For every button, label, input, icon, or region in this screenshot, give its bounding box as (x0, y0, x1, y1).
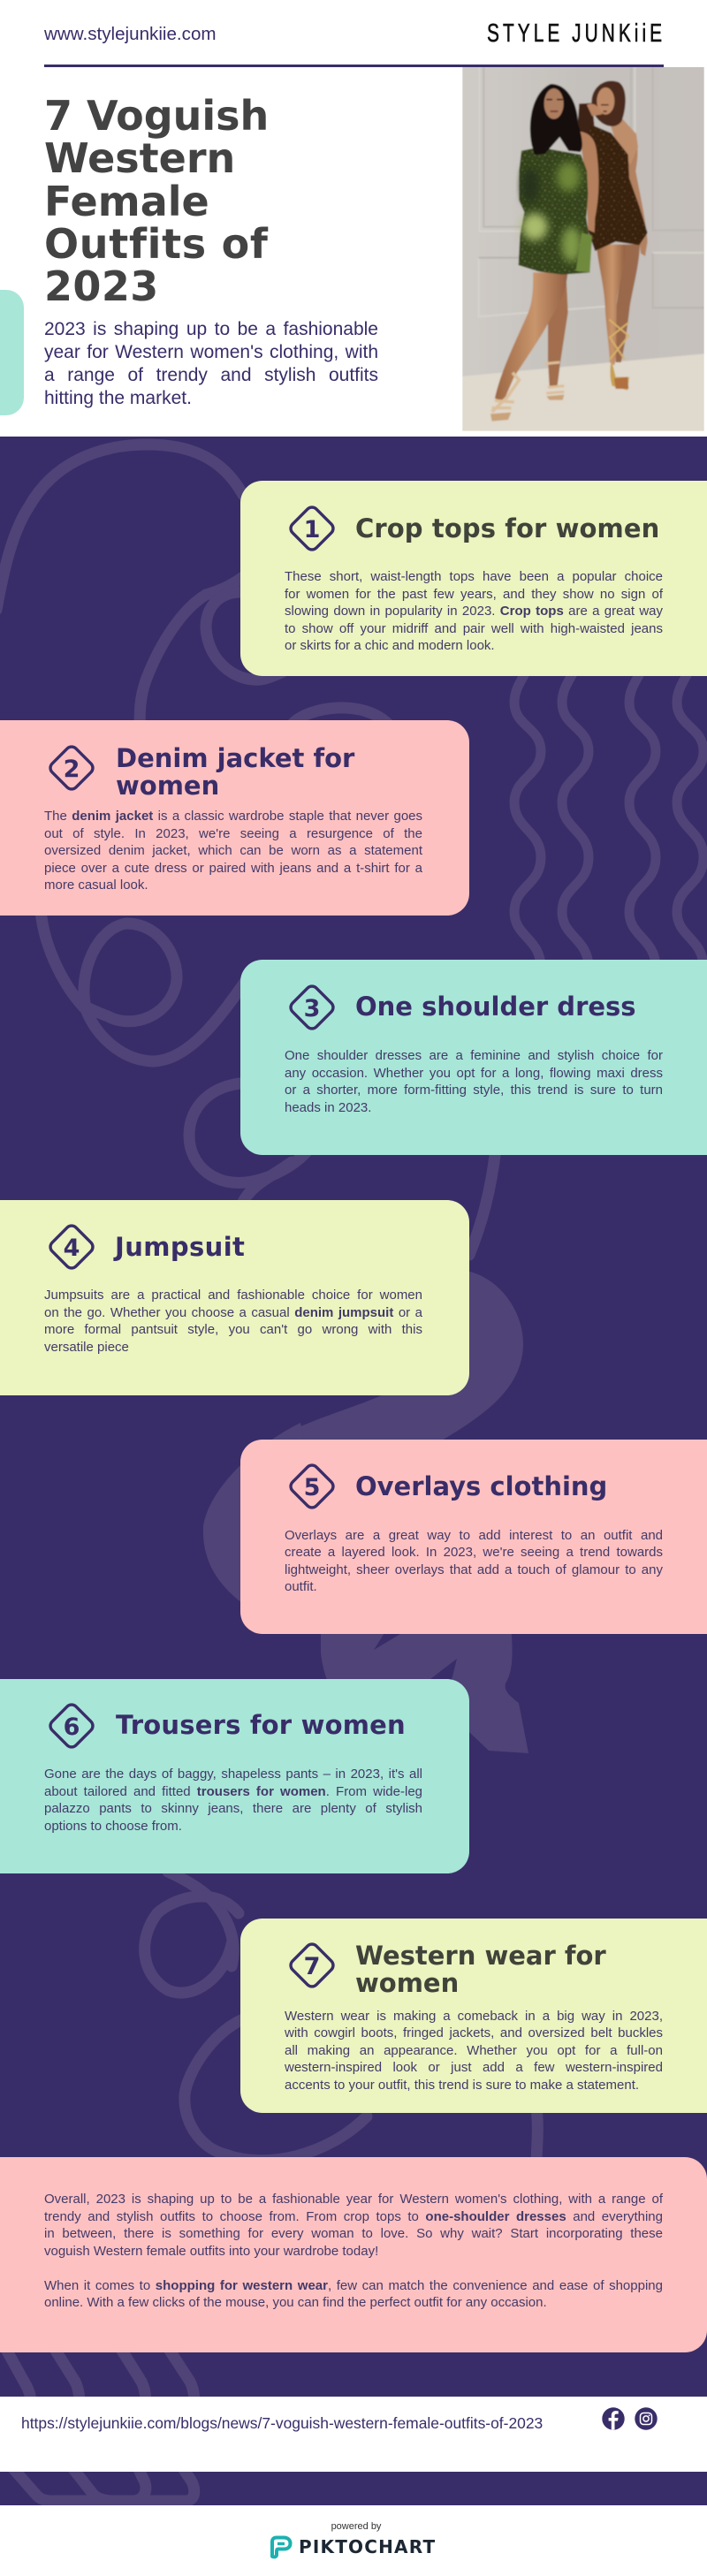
body text: piece over a cute dress or paired with jeans and a t-shirt for a (44, 861, 422, 875)
photo: two women in sequin dresses (462, 67, 704, 431)
card 7: western wear (240, 1918, 707, 2113)
title: Female (44, 178, 209, 225)
conclusion text: When it comes to shopping for western wear, few can match the convenience and ease of shopping (44, 2278, 663, 2292)
body text: or a shorter, more form-fitting style, this trend is sure to turn (285, 1083, 663, 1098)
body text: on the go. Whether you choose a casual denim jumpsuit or a (44, 1304, 422, 1320)
body text: Gone are the days of baggy, shapeless pants – in 2023, it's all (44, 1767, 422, 1782)
wall panels (479, 67, 704, 316)
icon: number 7 (289, 1942, 335, 1988)
intro text: 2023 is shaping up to be a fashionable (44, 319, 378, 339)
card 4: jumpsuit (0, 1200, 469, 1395)
powered by label: powered by (331, 2521, 381, 2532)
conclusion text: online. With a few clicks of the mouse, you can find the perfect outfit for any occasion. (44, 2295, 547, 2310)
conclusion text: voguish Western female outfits into your wardrobe today! (44, 2243, 378, 2259)
front woman (490, 84, 598, 422)
body text (285, 1527, 663, 1594)
body text: more casual look. (44, 878, 148, 893)
intro text: hitting the market. (44, 388, 192, 408)
body text: accents to your outfit, this trend is sure to make a statement. (285, 2077, 639, 2093)
body text (44, 1288, 422, 1354)
wall (462, 67, 704, 376)
heading: Western wear for (355, 1941, 606, 1971)
conclusion text: trendy and stylish outfits to choose from. From crop tops to one-shoulder dresses and everything (44, 2209, 663, 2223)
body text: heads in 2023. (285, 1099, 371, 1115)
icon: number 5 (289, 1463, 335, 1509)
title: Outfits of (44, 220, 269, 268)
icon: number 2 (49, 745, 95, 791)
body text: western-inspired look or just add a few western-inspired (285, 2060, 663, 2075)
conclusion text: Overall, 2023 is shaping up to be a fashionable year for Western women's clothing, with a range of (44, 2192, 663, 2207)
heading: women (116, 771, 219, 801)
body text: The denim jacket is a classic wardrobe staple that never goes (44, 809, 422, 824)
teal side tab (0, 290, 24, 415)
icon: piktochart logo (270, 2536, 292, 2559)
icon: number 1 (289, 505, 335, 551)
body text: all making an appearance. Whether you opt for a full-on (285, 2043, 663, 2057)
footer white band (0, 2397, 707, 2472)
heading: women (355, 1967, 459, 1997)
header rule (44, 65, 664, 67)
body text: out of style. In 2023, we're seeing a resurgence of the (44, 825, 422, 841)
body text: Western wear is making a comeback in a big way in 2023, (285, 2008, 663, 2024)
icon: facebook (602, 2407, 625, 2430)
conclusion panel (0, 2157, 707, 2352)
body text (285, 569, 663, 653)
website address: www.stylejunkiie.com (44, 24, 217, 44)
icon: number 4: 4 (64, 1235, 80, 1262)
conclusion text (44, 2192, 663, 2310)
body text (285, 1048, 663, 1115)
title (44, 92, 269, 310)
icon: number 1: 1 (304, 516, 320, 543)
icon: number 4 (49, 1224, 95, 1270)
icon: number 5: 5 (304, 1474, 320, 1501)
body text: palazzo pants to skinny jeans, there are plenty of stylish (44, 1801, 422, 1816)
conclusion text: in between, there is something for every woman to love. So why wait? Start incorporating these (44, 2226, 663, 2241)
piktochart wordmark: PIKTOCHART (299, 2536, 436, 2557)
icon: number 7: 7 (304, 1953, 320, 1980)
icon: number 2: 2 (64, 756, 80, 783)
card 2: denim jacket (0, 720, 469, 916)
intro text: year for Western women's clothing, with (44, 342, 378, 362)
icon: instagram (635, 2407, 658, 2430)
icon: number 3 (289, 984, 335, 1030)
body text: more formal pantsuit style, you can't go wrong with this (44, 1322, 422, 1337)
body text: These short, waist-length tops have been a popular choice (285, 569, 663, 584)
blob shapes (203, 1270, 528, 1753)
back woman (577, 81, 648, 391)
body text: Overlays are a great way to add interest to an outfit and (285, 1527, 663, 1543)
body text: with cowgirl boots, fringed jackets, and oversized belt buckles (285, 2025, 663, 2040)
body text: lightweight, sheer overlays that add a touch of glamour to any (285, 1562, 663, 1577)
body text: to show off your midriff and pair well with high-waisted jeans (285, 620, 663, 636)
title: Western (44, 134, 235, 182)
title: 2023 (44, 262, 159, 310)
card 6: trousers (0, 1679, 469, 1873)
intro text (44, 319, 378, 408)
footer URL: https://stylejunkiie.com/blogs/news/7-voguish-western-female-outfits-of-2023 (21, 2414, 543, 2432)
heading (355, 1941, 606, 1997)
icon: number 6: 6 (64, 1714, 80, 1741)
heading: Trousers for women (116, 1710, 406, 1740)
card 1: crop tops (240, 481, 707, 676)
body text: oversized denim jacket, which can be worn as a statement (44, 843, 422, 858)
body text: Jumpsuits are a practical and fashionable choice for women (44, 1288, 422, 1303)
body text: create a layered look. In 2023, we're seeing a trend towards (285, 1545, 663, 1560)
icon: number 6 (49, 1703, 95, 1749)
body text: options to choose from. (44, 1819, 182, 1833)
body text: for women for the past few years, and they show no sign of (285, 587, 663, 601)
body text: about tailored and fitted trousers for women. From wide-leg (44, 1783, 422, 1799)
body text: versatile piece (44, 1340, 129, 1354)
body text (285, 2008, 663, 2093)
body text: outfit. (285, 1579, 317, 1594)
heading: Overlays clothing (355, 1470, 607, 1501)
intro text: a range of trendy and stylish outfits (44, 365, 378, 385)
body text: slowing down in popularity in 2023. Crop tops are a great way (285, 604, 663, 619)
body text: any occasion. Whether you opt for a long, flowing maxi dress (285, 1066, 663, 1080)
card 3: one shoulder dress (240, 960, 707, 1155)
body text (44, 1767, 422, 1833)
heading: Crop tops for women (355, 513, 659, 543)
icon: number 3: 3 (304, 995, 320, 1022)
heading: One shoulder dress (355, 992, 636, 1022)
title: 7 Voguish (44, 92, 269, 140)
body text: One shoulder dresses are a feminine and stylish choice for (285, 1048, 663, 1063)
card 5: overlays clothing (240, 1439, 707, 1634)
floor (460, 353, 707, 434)
body text (44, 809, 422, 893)
body text: or skirts for a chic and modern look. (285, 638, 495, 653)
heading: Denim jacket for (116, 743, 354, 773)
brand logo: STYLE JUNKiiE (487, 19, 665, 48)
heading (116, 743, 355, 801)
heading: Jumpsuit (115, 1232, 245, 1262)
